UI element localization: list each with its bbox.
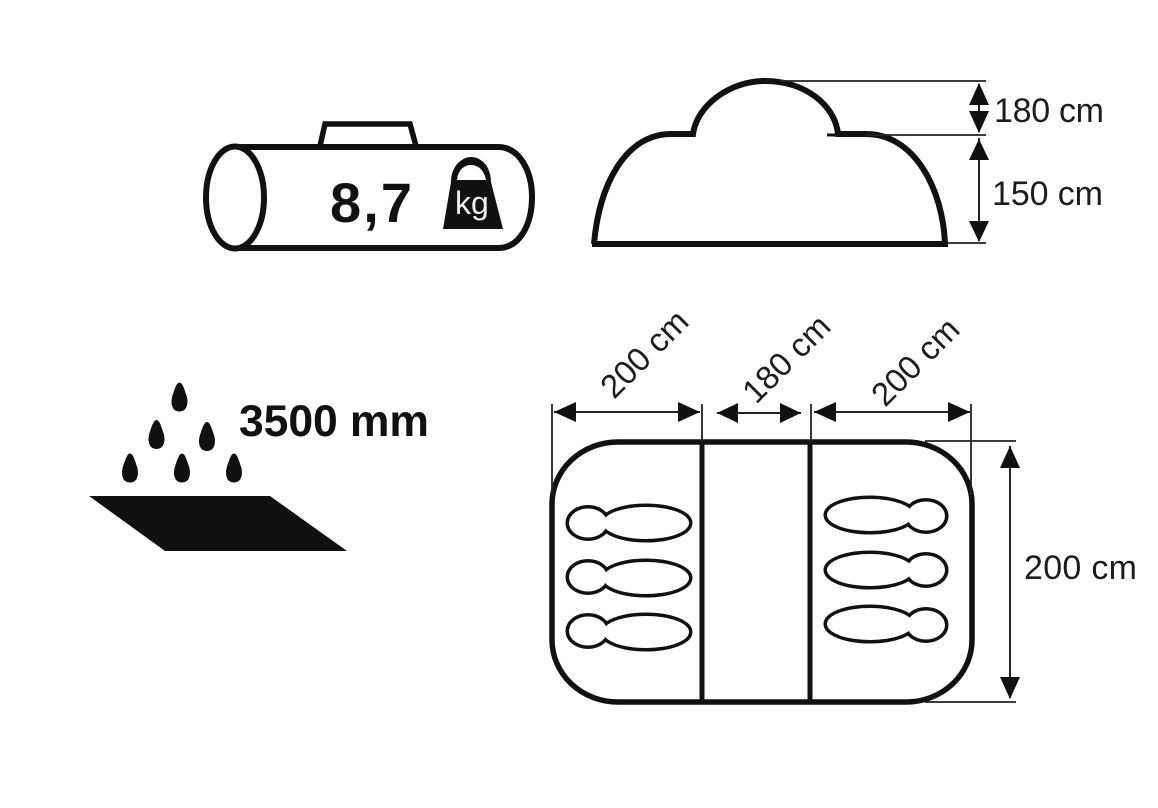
icon: kg weight <box>443 157 503 229</box>
dimension arrow right <box>1000 446 1020 699</box>
height label 150 cm: 150 cm <box>992 175 1103 213</box>
diagram: tent side profile with heights <box>592 81 1104 244</box>
waterproof rating label: 3500 mm <box>239 397 429 446</box>
diagram: tent floor plan <box>552 302 1137 702</box>
label: 180 cm middle: 180 cm <box>735 307 837 410</box>
dimension arrows top <box>554 402 970 423</box>
dimension lines top <box>552 404 1016 702</box>
weight value: 8,7 <box>330 171 412 234</box>
label: 200 cm side: 200 cm <box>1024 549 1137 587</box>
label: 200 cm left: 200 cm <box>593 302 695 405</box>
label: 200 cm right: 200 cm <box>864 310 966 413</box>
height label 180 cm: 180 cm <box>994 92 1104 130</box>
icon: rain drops and waterproof surface <box>89 382 347 551</box>
icon: carry bag with weight <box>206 124 532 248</box>
right sleeping bags <box>826 498 946 641</box>
left sleeping bags <box>568 506 690 649</box>
icon: kg weight: kg <box>455 185 489 221</box>
height arrows <box>969 83 989 242</box>
